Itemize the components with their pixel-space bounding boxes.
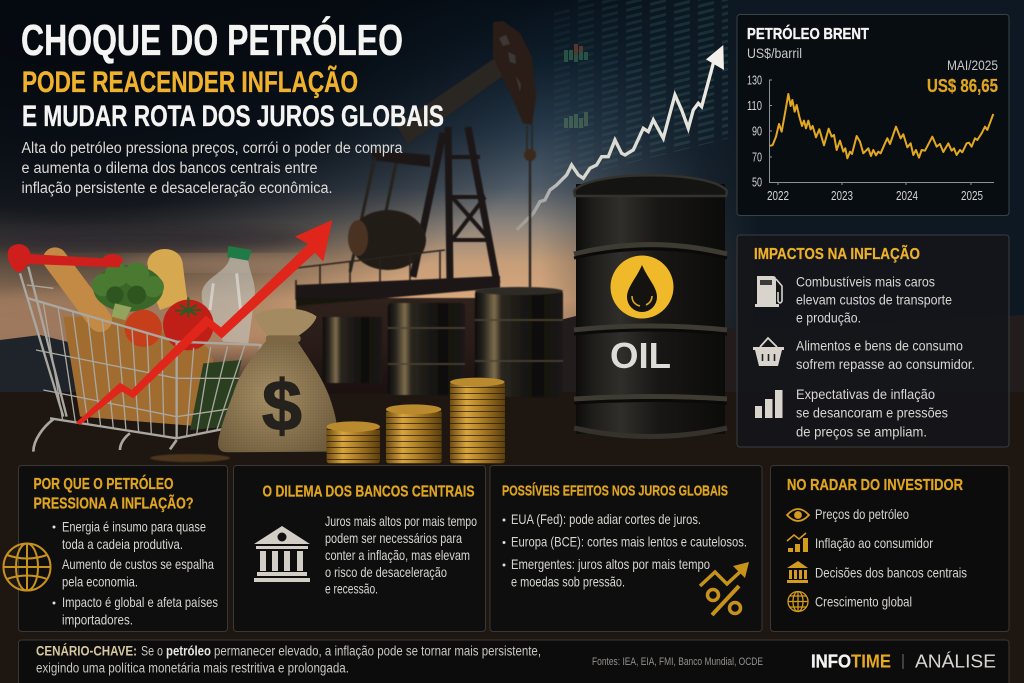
title: CHOQUE DO PETRÓLEO bbox=[21, 15, 403, 65]
bullet list: pela economia. bbox=[62, 574, 138, 590]
radar item: global growth: Crescimento global bbox=[815, 594, 912, 610]
line chart: 70 bbox=[752, 150, 762, 164]
title: PODE REACENDER INFLAÇÃO bbox=[22, 65, 358, 99]
title: E MUDAR ROTA DOS JUROS GLOBAIS bbox=[22, 100, 444, 133]
subtitle text: inflação persistente e desaceleração econômica. bbox=[22, 180, 332, 197]
money bag bbox=[218, 308, 337, 452]
radar item: central bank decisions: Decisões dos bancos centrais bbox=[815, 564, 967, 580]
current date: MAI/2025 bbox=[947, 58, 998, 73]
impact text: expectations: Expectativas de inflação bbox=[796, 386, 935, 402]
bullet list: Impacto é global e afeta países bbox=[62, 594, 218, 610]
coin stacks bbox=[327, 378, 505, 463]
line chart bbox=[747, 74, 994, 203]
bullet list: e moedas sob pressão. bbox=[511, 574, 625, 590]
icon: globe bbox=[4, 544, 50, 590]
sources: Fontes: IEA, EIA, FMI, Banco Mundial, OCDE bbox=[592, 656, 763, 668]
impact text: fuel: elevam custos de transporte bbox=[796, 292, 952, 308]
panel: possible effects on global rates bbox=[490, 466, 762, 632]
impact text: expectations: de preços se ampliam. bbox=[796, 424, 927, 440]
key scenario text: petróleo bbox=[166, 644, 211, 658]
dilemma text: conter a inflação, mas elevam bbox=[325, 547, 470, 563]
bullet list: toda a cadeia produtiva. bbox=[62, 536, 183, 552]
chart heading: PETRÓLEO BRENT bbox=[747, 24, 869, 43]
panel heading: NO RADAR DO INVESTIDOR bbox=[787, 477, 963, 494]
white rising chart arrow bbox=[517, 45, 724, 230]
panel: central bank dilemma bbox=[234, 466, 486, 632]
brand logo: TIME bbox=[851, 650, 891, 672]
radar item: oil prices: Preços do petróleo bbox=[815, 506, 909, 522]
red inflation arrow bbox=[76, 220, 332, 425]
icon: eye bbox=[787, 509, 809, 521]
icon: bank bbox=[787, 561, 808, 583]
panel: key scenario footer bbox=[18, 640, 1009, 683]
money bag: $ bbox=[262, 366, 302, 446]
brand logo: ANÁLISE bbox=[915, 650, 996, 672]
brand logo: INFO bbox=[811, 650, 851, 672]
dilemma text bbox=[325, 513, 477, 596]
panel: Brent oil chart bbox=[737, 14, 1009, 216]
barrel label: OIL bbox=[610, 335, 671, 376]
key scenario text: Se o bbox=[141, 644, 163, 658]
line chart: 2023 bbox=[831, 189, 853, 203]
icon: bars bbox=[755, 390, 782, 418]
panel heading: POSSÍVEIS EFEITOS NOS JUROS GLOBAIS bbox=[502, 482, 728, 500]
subtitle text bbox=[22, 140, 403, 197]
line chart: 110 bbox=[747, 99, 762, 113]
pumpjack silhouette bbox=[296, 21, 536, 393]
dilemma text: podem ser necessários para bbox=[325, 530, 462, 546]
brand logo bbox=[811, 650, 996, 672]
panel: impacts on inflation bbox=[737, 235, 1009, 447]
bullet list: Europa (BCE): cortes mais lentos e cautelosos. bbox=[511, 534, 747, 550]
impact text: food: sofrem repasse ao consumidor. bbox=[796, 356, 975, 372]
impact text: food bbox=[796, 338, 975, 372]
key scenario text: exigindo uma política monetária mais restritiva e prolongada. bbox=[36, 660, 349, 676]
panel heading: PRESSIONA A INFLAÇÃO? bbox=[34, 494, 194, 512]
background barrels bbox=[323, 287, 563, 397]
chart unit: US$/barril bbox=[747, 45, 802, 61]
bullet list: Energia é insumo para quase bbox=[62, 518, 206, 534]
bullet list: importadores. bbox=[62, 612, 133, 628]
key scenario text: CENÁRIO-CHAVE: bbox=[36, 644, 137, 658]
subtitle text: e aumenta o dilema dos bancos centrais entre bbox=[22, 160, 318, 177]
current price: US$ 86,65 bbox=[927, 75, 998, 96]
line chart: 2024 bbox=[896, 189, 918, 203]
bullet list bbox=[52, 518, 218, 628]
dilemma text: e recessão. bbox=[325, 580, 378, 596]
shopping cart with groceries bbox=[8, 244, 262, 452]
cart handle bbox=[8, 244, 123, 272]
bullet list: EUA (Fed): pode adiar cortes de juros. bbox=[511, 511, 701, 527]
line chart: 130 bbox=[747, 74, 762, 88]
impact text: fuel: Combustíveis mais caros bbox=[796, 274, 935, 290]
bullet list: Emergentes: juros altos por mais tempo bbox=[511, 556, 710, 572]
market ticker board bbox=[548, 0, 728, 183]
title bbox=[21, 15, 444, 133]
bullet list: Aumento de custos se espalha bbox=[62, 556, 214, 572]
icon: oil drop logo bbox=[610, 256, 674, 318]
main oil barrel bbox=[574, 175, 727, 436]
icon: rising rates percent bbox=[700, 562, 749, 615]
panel heading bbox=[34, 475, 194, 512]
radar item: consumer inflation: Inflação ao consumidor bbox=[815, 535, 933, 551]
dilemma text: o risco de desaceleração bbox=[325, 564, 447, 580]
cart wire basket bbox=[20, 267, 262, 452]
subtitle text: Alta do petróleo pressiona preços, corrói o poder de compra bbox=[22, 140, 403, 157]
icon: globe bbox=[788, 592, 808, 612]
icon: chart bbox=[787, 533, 808, 552]
panel: investor radar bbox=[770, 466, 1009, 632]
dilemma text: Juros mais altos por mais tempo bbox=[325, 513, 477, 529]
icon: bank bbox=[254, 526, 310, 582]
line chart: 90 bbox=[752, 124, 762, 138]
panel heading: IMPACTOS NA INFLAÇÃO bbox=[754, 243, 920, 263]
panel: why oil pressures inflation bbox=[4, 466, 228, 632]
groceries bbox=[55, 246, 255, 430]
impact text: fuel: e produção. bbox=[796, 310, 861, 326]
panel heading: POR QUE O PETRÓLEO bbox=[34, 475, 174, 493]
impact text: expectations: se desancoram e pressões bbox=[796, 404, 948, 420]
key scenario text: permanecer elevado, a inflação pode se tornar mais persistente, bbox=[214, 644, 541, 658]
impact text: food: Alimentos e bens de consumo bbox=[796, 338, 963, 354]
line chart: 50 bbox=[752, 176, 762, 190]
key scenario text bbox=[36, 644, 541, 676]
impact text: expectations bbox=[796, 386, 948, 440]
bullet list bbox=[502, 511, 747, 590]
panel heading: O DILEMA DOS BANCOS CENTRAIS bbox=[262, 484, 474, 500]
icon: shopping basket bbox=[753, 338, 784, 366]
impact text: fuel bbox=[796, 274, 952, 326]
line chart: 2025 bbox=[961, 189, 983, 203]
icon: fuel pump bbox=[755, 276, 782, 307]
line chart: 2022 bbox=[767, 189, 789, 203]
